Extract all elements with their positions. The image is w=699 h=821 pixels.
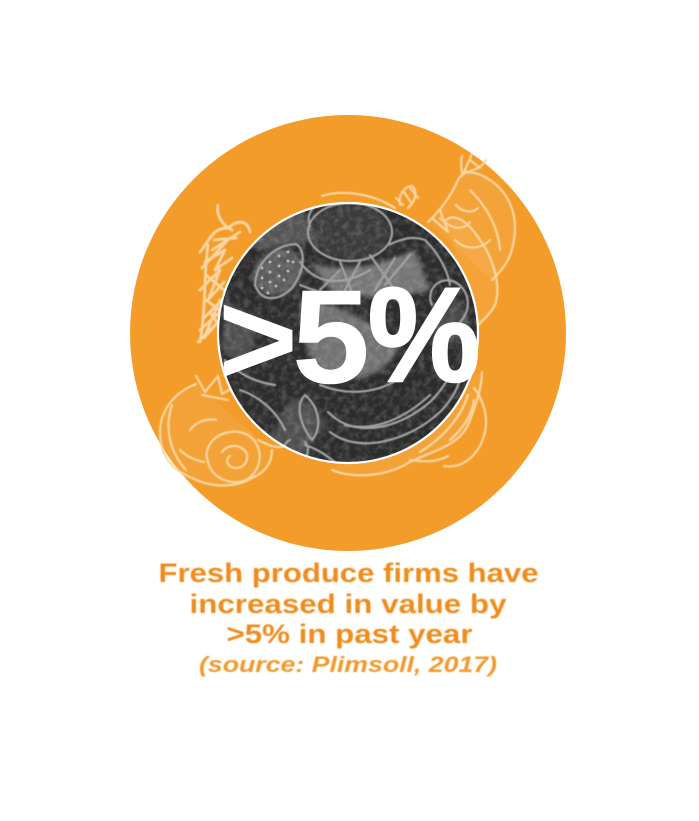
dark photo circle with fruit texture	[218, 203, 478, 463]
caption line 1: Fresh produce firms have	[158, 558, 538, 588]
fruit outlines	[225, 203, 468, 462]
strawberry seeds	[260, 250, 294, 294]
gray texture	[222, 205, 470, 460]
five: 5	[292, 263, 370, 412]
icon: carrot leaves	[322, 186, 418, 208]
infographic	[130, 115, 566, 678]
percent sign: %	[368, 261, 480, 410]
source note: (source: Plimsoll, 2017)	[199, 652, 497, 677]
fruit line art on orange ring	[160, 154, 515, 486]
orange circle	[130, 115, 566, 551]
big statistic	[218, 261, 480, 414]
icon: tomato	[160, 376, 286, 486]
caption	[158, 558, 538, 677]
greater-than sign: >	[218, 265, 298, 414]
icon: pear	[428, 154, 515, 328]
speckle	[218, 203, 478, 463]
white ring around photo circle	[218, 203, 478, 463]
icon: strawberry leaves	[198, 205, 250, 342]
icon: banana and pear bottom	[332, 372, 486, 475]
caption line 2: increased in value by	[190, 589, 506, 619]
caption line 3: >5% in past year	[226, 619, 473, 649]
